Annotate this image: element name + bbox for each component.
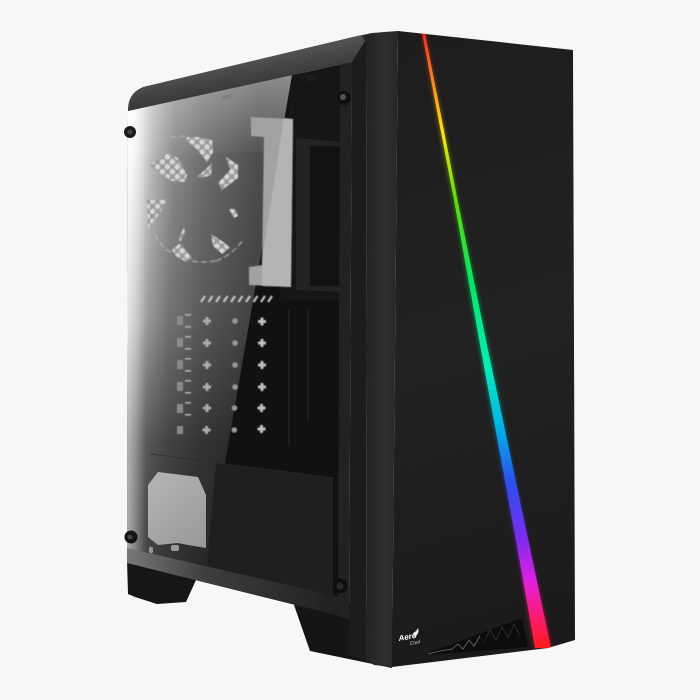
vent pattern dark (484, 624, 520, 642)
case body (124, 31, 575, 668)
rear chassis strut 2 (307, 310, 309, 422)
RGB light stripe (422, 33, 552, 648)
side bevel (348, 38, 367, 660)
drive bay opening (310, 146, 342, 286)
shroud body (207, 463, 333, 598)
interior chassis (288, 72, 340, 445)
left foot (127, 560, 196, 604)
logo swirl (413, 628, 418, 637)
glass reflection (127, 75, 292, 567)
screw top right (337, 91, 351, 105)
logo wordmark: Aero (397, 631, 417, 643)
drive bay frame (296, 138, 342, 292)
bracket base (249, 117, 293, 287)
front vent (423, 618, 528, 655)
bracket cut-out (249, 117, 293, 287)
bracket lighter part (262, 118, 293, 287)
screw bottom right (332, 578, 348, 594)
illustration: PC tower case with tempered glass side and RGB stripe (124, 31, 575, 668)
screw top left (124, 126, 136, 138)
glass left edge light (127, 107, 146, 567)
PSU small hole (171, 545, 179, 551)
shroud top edge (150, 454, 333, 478)
connector mark (222, 94, 231, 100)
dot column (232, 318, 238, 433)
upper chassis wall (292, 72, 308, 76)
fan mesh patches (147, 137, 238, 262)
vent recess (423, 618, 528, 655)
cross column right (258, 318, 266, 433)
glass reflection top light (128, 75, 292, 160)
cross column left (202, 317, 211, 434)
stripe core (422, 33, 551, 648)
rear chassis strut (288, 310, 290, 445)
connector mark right (305, 74, 317, 82)
logo subword: Cool (409, 639, 421, 647)
cable squares (177, 316, 183, 434)
motherboard standoff grid (177, 314, 266, 434)
top band markings (222, 74, 317, 100)
PSU tiny hole (149, 547, 153, 553)
vent pattern light (428, 636, 480, 654)
PSU shroud (148, 454, 333, 598)
frame column (338, 62, 352, 620)
screw bottom left (124, 530, 138, 544)
cable slots (185, 314, 191, 416)
fan ring segments (155, 136, 243, 262)
front bevel (362, 31, 398, 667)
front panel (392, 31, 575, 667)
side panel interior (127, 62, 352, 618)
top panel (128, 33, 372, 111)
right foot (294, 600, 400, 668)
stripe soft glow (422, 33, 552, 648)
brand logo (397, 628, 421, 647)
glass reflection shading (127, 75, 292, 567)
fan holes (147, 136, 243, 262)
PSU opening (148, 472, 206, 548)
glass bottom frame (127, 548, 348, 618)
hatched vent (201, 296, 272, 302)
